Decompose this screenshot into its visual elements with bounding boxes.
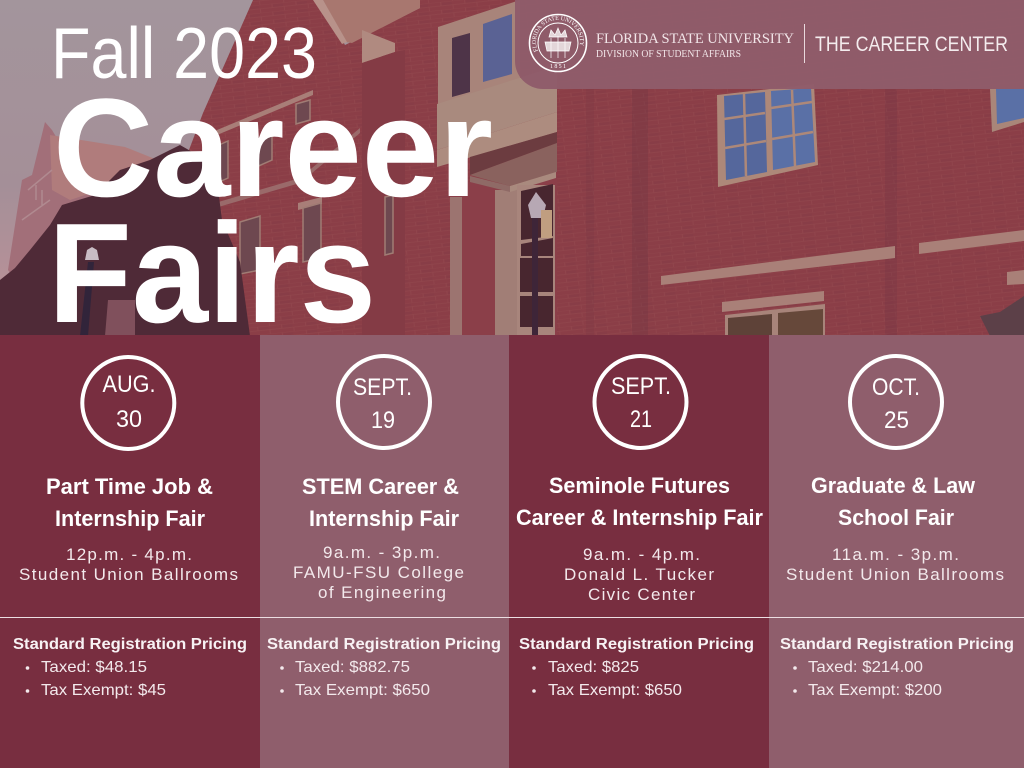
time and place [19,545,238,584]
pricing: Taxed: $882.75 [295,659,410,676]
column background [769,335,1024,768]
dormer [362,30,395,63]
date badge: SEPT. [353,374,412,401]
pricing: Tax Exempt: $650 [295,682,430,699]
fair name: Graduate & Law [811,473,976,498]
large window [717,84,818,187]
header panel [515,0,1024,89]
front lamp post [528,192,552,336]
title line: Fairs: Fairs [48,194,376,353]
entry porch [450,172,557,336]
gable trim [313,0,347,44]
pricing: Standard Registration Pricing [13,636,247,653]
roof [323,0,420,43]
time and place [564,545,714,604]
date badge: 25 [884,407,909,434]
fair name [811,473,976,530]
panel: Sept 19 fair [260,335,509,768]
date badge: OCT. [872,374,920,401]
main brick wall [170,0,1024,336]
fair name: Internship Fair [309,506,459,531]
time and place: Student Union Ballrooms [19,565,238,584]
time and place: 9a.m. - 4p.m. [583,545,700,564]
division name: DIVISION OF STUDENT AFFAIRS [596,49,741,60]
fair name: Internship Fair [55,506,205,531]
pricing: Taxed: $214.00 [808,659,923,676]
date badge: 19 [371,407,395,434]
date badge [82,357,174,449]
time and place: FAMU-FSU College [293,563,464,582]
pricing [13,636,247,699]
fair name: Career & Internship Fair [516,505,763,530]
FSU seal: FLORIDA STATE UNIVERSITY [532,16,584,52]
pricing: Tax Exempt: $45 [41,682,166,699]
fair name: Part Time Job & [46,474,213,499]
title line: Career: Career [53,69,493,226]
pricing [519,636,754,699]
stone ledges [661,230,1024,312]
fair name: STEM Career & [302,474,459,499]
fair name: School Fair [838,505,954,530]
date badge: AUG. [102,371,156,398]
logo divider [804,24,805,63]
tan balcony with window bay [437,0,557,186]
column background [509,335,769,768]
date badge [338,356,430,448]
time and place: Civic Center [588,585,695,604]
pricing [780,636,1014,699]
ledge on left wall [205,90,313,140]
panel: Aug 30 fair [0,335,260,768]
pricing: Taxed: $48.15 [41,659,147,676]
darker brick bay [362,50,405,336]
time and place: 12p.m. - 4p.m. [66,545,192,564]
pricing [267,636,501,699]
FSU seal [528,14,588,72]
fair name: Seminole Futures [549,473,730,498]
time and place: Donald L. Tucker [564,565,714,584]
time and place: 9a.m. - 3p.m. [323,543,440,562]
time and place [293,543,464,602]
pricing: Standard Registration Pricing [267,636,501,653]
fair name [516,473,763,530]
date badge: 30 [116,406,142,433]
time and place: 11a.m. - 3p.m. [832,545,959,564]
time and place: of Engineering [318,583,446,602]
fair name [302,474,459,531]
pillar shadow [632,89,648,336]
date badge: SEPT. [611,373,671,400]
fair name [46,474,213,531]
title [48,14,493,353]
tree canopy [0,145,250,336]
lower window [725,304,825,336]
date badge [850,356,942,448]
panel: Sept 21 fair [509,335,769,768]
left wall windows [219,100,393,274]
date badge: 21 [630,406,652,433]
FSU seal: 1851 [550,64,566,70]
pricing: Taxed: $825 [548,659,639,676]
pricing: Standard Registration Pricing [519,636,754,653]
date badge [594,356,686,448]
palm bottom right [980,296,1024,336]
background photo: campus brick building [0,0,1024,336]
pricing: Tax Exempt: $650 [548,682,682,699]
time and place: Student Union Ballrooms [786,565,1004,584]
distant building [8,122,170,300]
time and place [786,545,1004,584]
panel: Oct 25 fair [769,335,1024,768]
title line: Fall 2023: Fall 2023 [51,14,317,94]
university name: FLORIDA STATE UNIVERSITY [596,31,794,47]
column background [260,335,509,768]
column background [0,335,260,768]
pricing: Tax Exempt: $200 [808,682,942,699]
pricing: Standard Registration Pricing [780,636,1014,653]
header bar [515,0,1024,89]
right window [990,89,1024,132]
sky [0,0,1024,336]
